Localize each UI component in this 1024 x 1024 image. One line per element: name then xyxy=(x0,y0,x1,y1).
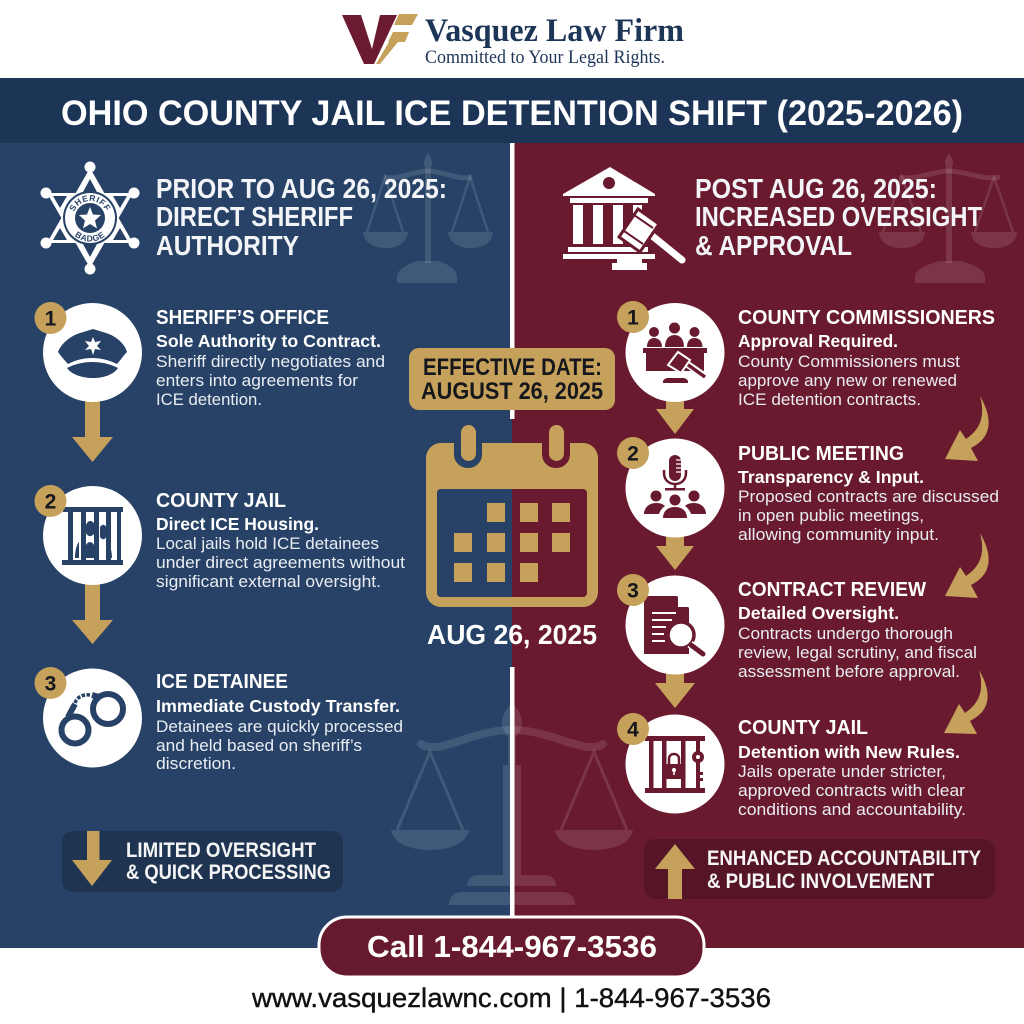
watermark: bottom centre scales xyxy=(391,702,633,905)
left step 1: sheriff's office: ICE detention. xyxy=(156,391,262,409)
call to action pill xyxy=(319,917,704,977)
left step 1: sheriff's office: Sheriff directly negotiates and xyxy=(156,353,385,371)
right step 2: public meeting: PUBLIC MEETING xyxy=(738,442,904,465)
callout: limited oversight: & QUICK PROCESSING xyxy=(126,861,331,884)
right step 4: county jail: Jails operate under stricter, xyxy=(738,763,946,781)
icon: courthouse with gavel xyxy=(563,167,682,270)
effective date label: EFFECTIVE DATE: xyxy=(423,354,602,381)
left panel heading xyxy=(156,173,447,261)
logo mark: V xyxy=(342,15,397,64)
left arrow 1 xyxy=(72,400,113,462)
left panel heading: AUTHORITY xyxy=(156,230,299,261)
callout: enhanced accountability: ENHANCED ACCOUNTABILITY xyxy=(707,847,981,870)
date caption: AUG 26, 2025 xyxy=(427,619,597,650)
tagline: Committed to Your Legal Rights. xyxy=(425,47,665,68)
logo mark: F xyxy=(376,14,418,64)
right arrow 1 xyxy=(656,400,694,434)
right step 3: contract review: Contracts undergo thorough xyxy=(738,625,953,643)
callout: limited oversight xyxy=(62,831,343,892)
call to action pill: Call 1-844-967-3536 xyxy=(367,929,657,964)
main title: OHIO COUNTY JAIL ICE DETENTION SHIFT (2025-2026) xyxy=(61,94,963,133)
left step 1: sheriff's office: 1 xyxy=(45,308,57,330)
callout: enhanced accountability xyxy=(644,839,995,899)
centre divider xyxy=(510,143,514,917)
left step 2: county jail: COUNTY JAIL xyxy=(156,489,286,512)
right step 2: public meeting: Proposed contracts are discussed xyxy=(738,488,999,506)
right step 3: contract review xyxy=(617,574,977,681)
right step 1: county commissioners xyxy=(617,301,995,409)
effective date label: AUGUST 26, 2025 xyxy=(421,378,603,405)
right step 1: county commissioners: County Commissioners must xyxy=(738,353,960,371)
icon: police cap xyxy=(58,329,127,378)
left arrow 2 xyxy=(72,583,113,644)
icon: calendar xyxy=(426,425,598,607)
left step 1: sheriff's office: Sole Authority to Contract. xyxy=(156,331,381,351)
footer contact line: www.vasquezlawnc.com | 1-844-967-3536 xyxy=(251,983,771,1013)
left step 3: ice detainee: ICE DETAINEE xyxy=(156,670,288,693)
left step 2: county jail: under direct agreements without xyxy=(156,554,405,572)
right step 2: public meeting xyxy=(617,437,999,544)
right step 4: county jail: 4 xyxy=(627,718,639,742)
right step 3: contract review: assessment before approval. xyxy=(738,663,960,681)
icon: document and magnifier xyxy=(644,595,703,655)
right step 2: public meeting: allowing community input. xyxy=(738,526,939,544)
right arrow 3 xyxy=(655,672,695,708)
right step 4: county jail xyxy=(617,713,966,819)
curved arrow 3 xyxy=(944,670,988,734)
title band xyxy=(0,78,1024,143)
right arrow 2 xyxy=(656,535,694,570)
panel: right maroon background xyxy=(512,143,1024,948)
right step 4: county jail: approved contracts with clear xyxy=(738,782,966,800)
right step 4: county jail: conditions and accountability. xyxy=(738,801,966,819)
right step 3: contract review: CONTRACT REVIEW xyxy=(738,578,927,601)
right step 4: county jail: Detention with New Rules. xyxy=(738,742,960,762)
left step 2: county jail: Direct ICE Housing. xyxy=(156,514,319,534)
right step 3: contract review: Detailed Oversight. xyxy=(738,603,899,623)
left step 1: sheriff's office xyxy=(34,302,385,409)
right step 1: county commissioners: approve any new or renewed xyxy=(738,372,957,390)
right step 1: county commissioners: 1 xyxy=(627,306,639,330)
icon: sheriff badge xyxy=(40,162,140,274)
right step 3: contract review: 3 xyxy=(627,580,639,602)
left step 2: county jail: 2 xyxy=(45,490,56,514)
callout: enhanced accountability: & PUBLIC INVOLVEMENT xyxy=(707,870,934,893)
left panel heading: PRIOR TO AUG 26, 2025: xyxy=(156,173,447,204)
firm name: Vasquez Law Firm xyxy=(425,13,684,49)
left step 3: ice detainee: Detainees are quickly processed xyxy=(156,718,403,736)
icon: jail bars xyxy=(62,507,123,565)
header logo xyxy=(342,13,684,68)
right step 1: county commissioners: Approval Required. xyxy=(738,331,898,351)
left step 2: county jail: Local jails hold ICE detainees xyxy=(156,535,379,553)
right panel heading: & APPROVAL xyxy=(695,230,852,261)
left step 3: ice detainee: 3 xyxy=(45,672,56,696)
icon: sheriff badge: SHERIFF xyxy=(70,194,111,211)
icon: microphone and audience xyxy=(644,455,706,518)
right step 2: public meeting: Transparency & Input. xyxy=(738,467,924,487)
icon: up arrow xyxy=(655,844,695,899)
left step 3: ice detainee: and held based on sheriff’s xyxy=(156,737,362,755)
callout: limited oversight: LIMITED OVERSIGHT xyxy=(126,839,316,862)
icon: handcuffs xyxy=(62,694,123,744)
left step 3: ice detainee xyxy=(34,667,403,773)
watermark: top right scales xyxy=(879,153,1017,283)
right panel heading xyxy=(695,173,982,261)
left step 1: sheriff's office: enters into agreements for xyxy=(156,372,359,390)
right step 2: public meeting: 2 xyxy=(627,442,639,466)
icon: bars with lock and key xyxy=(645,736,705,793)
right step 4: county jail: COUNTY JAIL xyxy=(738,716,868,739)
right step 3: contract review: review, legal scrutiny, and fiscal xyxy=(738,644,977,662)
icon: sheriff badge: BADGE xyxy=(74,231,105,242)
right panel heading: INCREASED OVERSIGHT xyxy=(695,201,982,232)
right step 1: county commissioners: ICE detention contracts. xyxy=(738,391,921,409)
left step 1: sheriff's office: SHERIFF’S OFFICE xyxy=(156,306,329,329)
watermark: top left scales xyxy=(363,153,493,283)
panel: left navy background xyxy=(0,143,512,948)
left panel heading: DIRECT SHERIFF xyxy=(156,201,353,232)
left step 2: county jail xyxy=(34,485,405,591)
curved arrow 1 xyxy=(945,396,989,461)
effective date label xyxy=(409,348,615,410)
left step 2: county jail: significant external oversight. xyxy=(156,573,381,591)
left step 3: ice detainee: discretion. xyxy=(156,755,236,773)
curved arrow 2 xyxy=(945,533,989,598)
right step 2: public meeting: in open public meetings, xyxy=(738,507,924,525)
icon: commissioners at desk with gavel xyxy=(643,322,707,383)
right panel heading: POST AUG 26, 2025: xyxy=(695,173,937,204)
icon: down arrow xyxy=(72,831,112,886)
left step 3: ice detainee: Immediate Custody Transfer. xyxy=(156,696,400,716)
right step 1: county commissioners: COUNTY COMMISSIONERS xyxy=(738,306,995,329)
